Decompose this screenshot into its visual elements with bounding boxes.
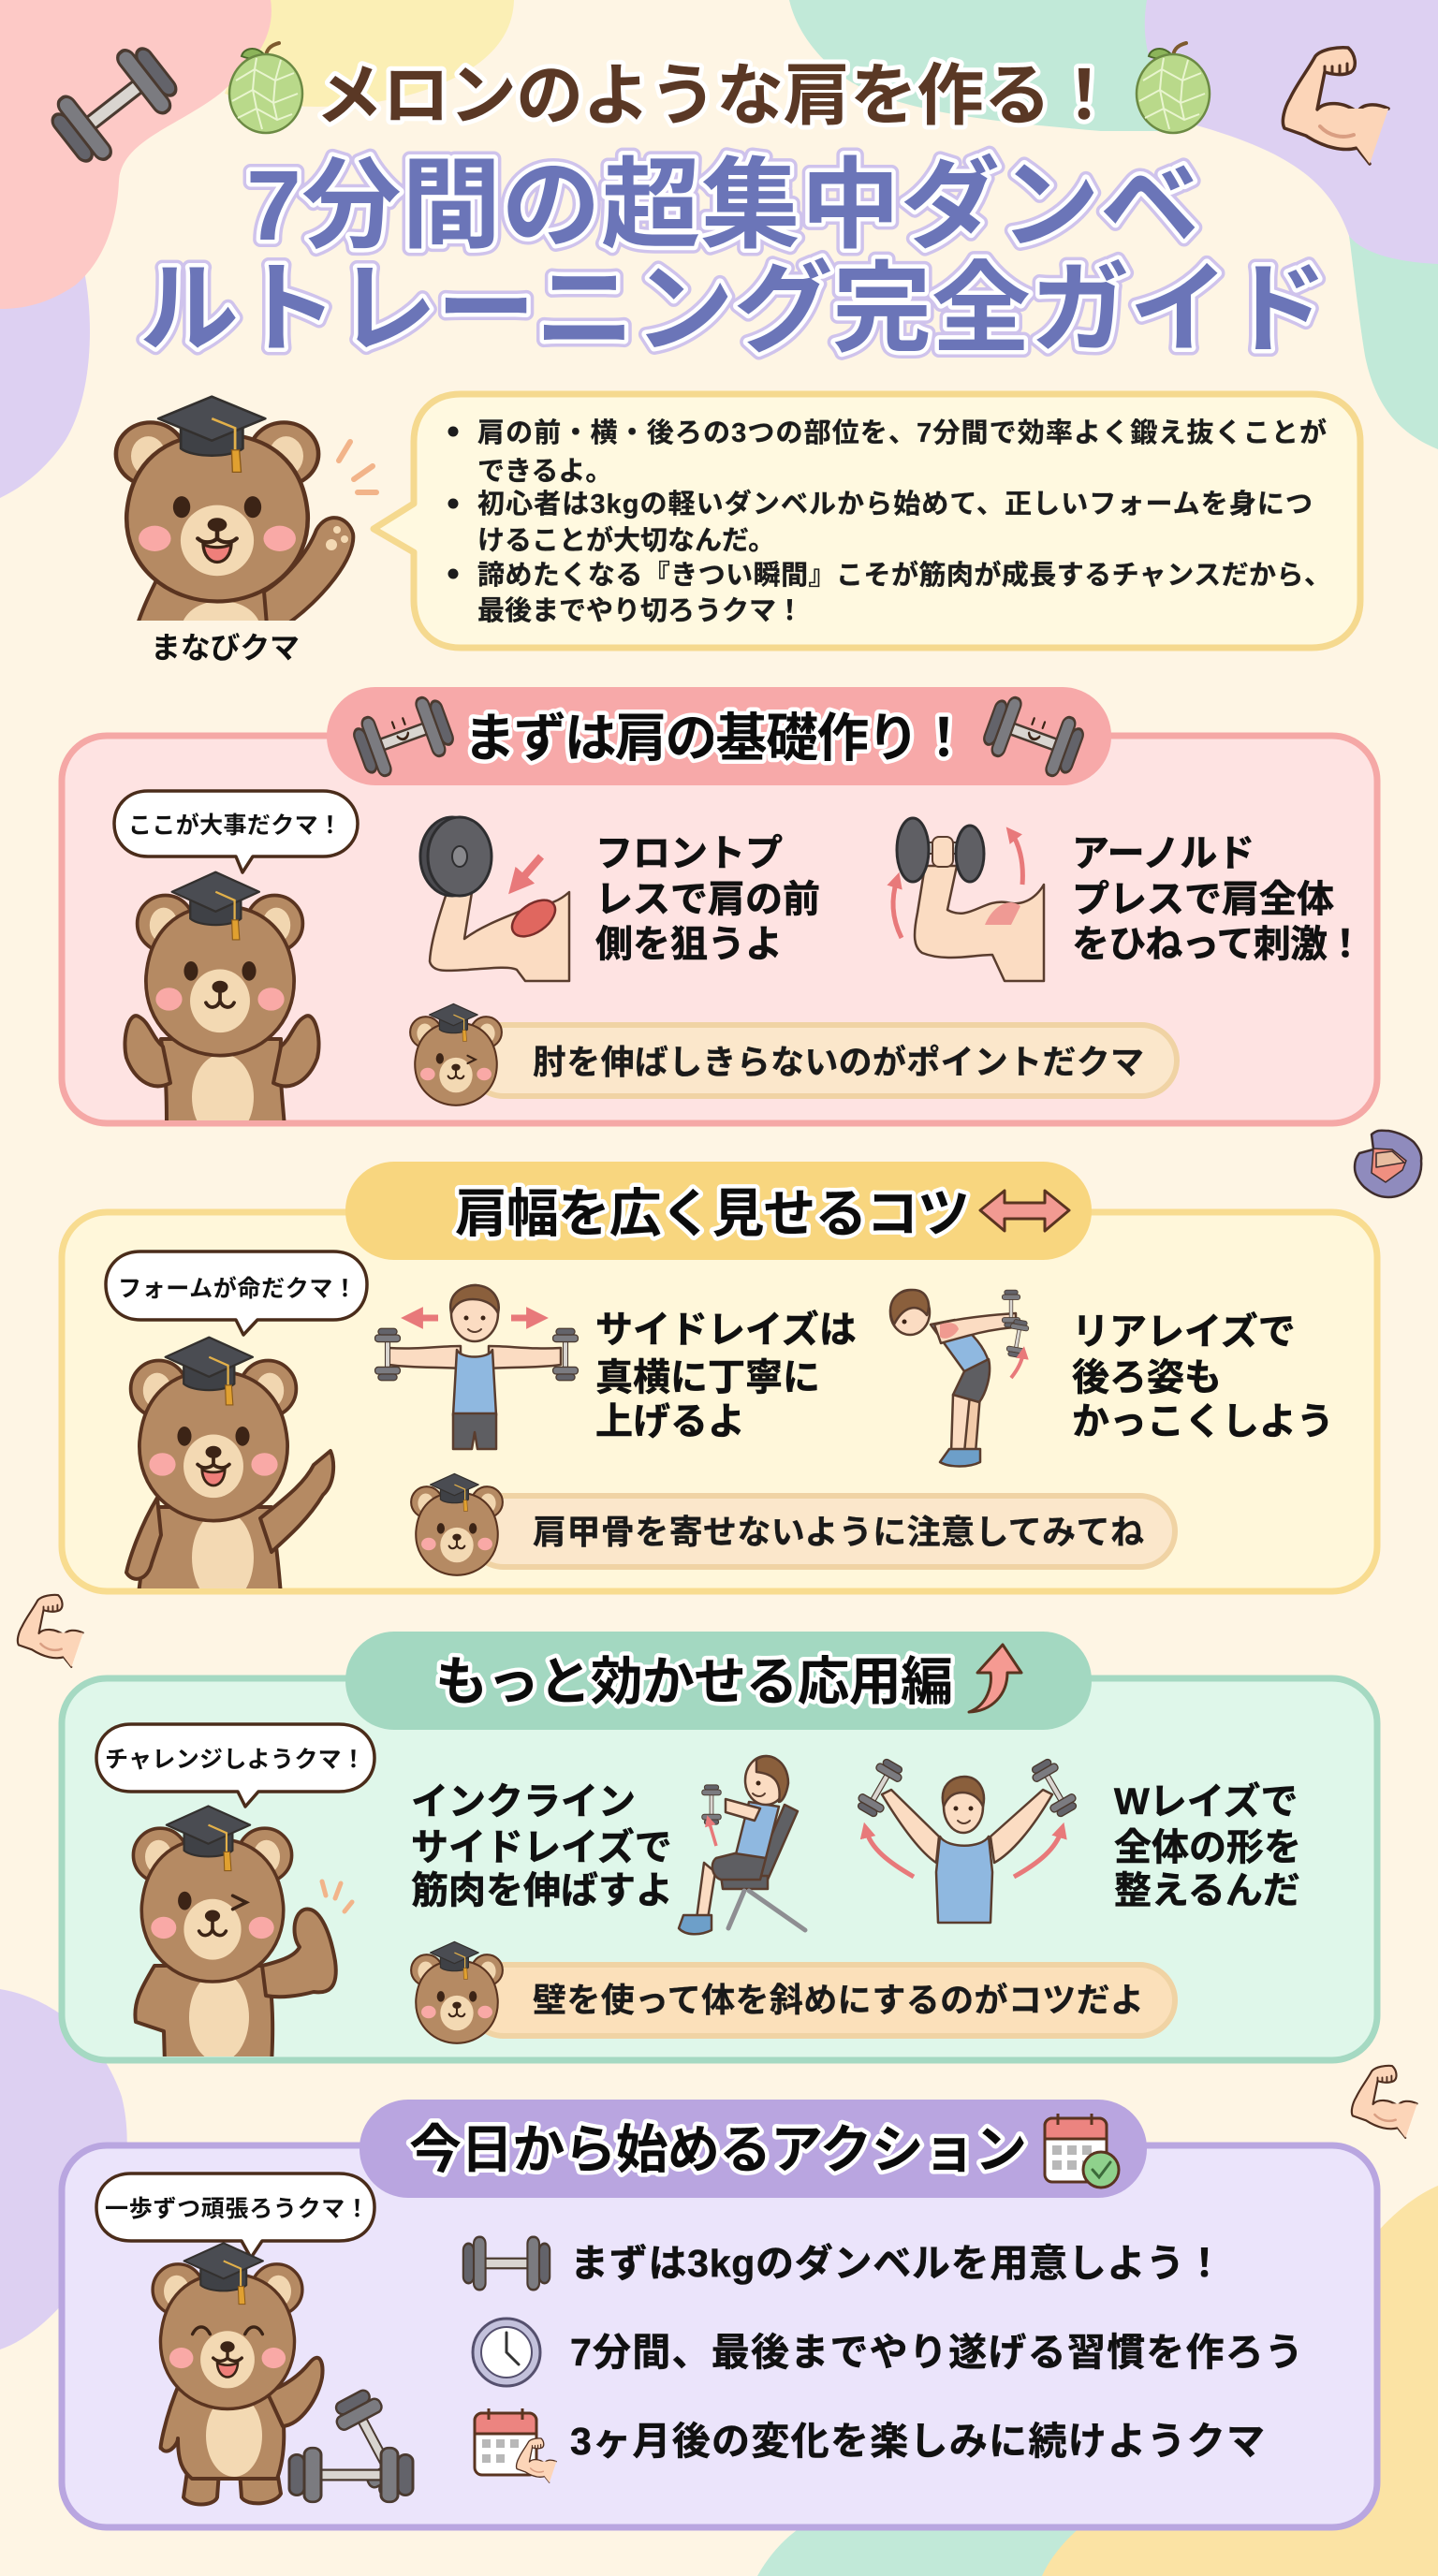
illustration: W raise bbox=[854, 1756, 1080, 1923]
panel 3: advanced bbox=[62, 1632, 1377, 2064]
text: side raise: 上げるよ bbox=[595, 1401, 745, 1442]
text: front press bbox=[595, 833, 820, 965]
icon: dumbbell with face right bbox=[979, 692, 1088, 782]
text: incline side raise: 筋肉を伸ばすよ bbox=[411, 1870, 673, 1911]
panel 4 heading: 今日から始めるアクション bbox=[409, 2120, 1027, 2179]
mini bear: panel 2 bbox=[411, 1473, 503, 1575]
action 1: dumbbell row: まずは3kgのダンベルを用意しよう！ bbox=[570, 2242, 1224, 2285]
text: rear raise: かっこくしよう bbox=[1072, 1401, 1334, 1442]
text: W raise: 整えるんだ bbox=[1114, 1870, 1300, 1911]
text: front press: 側を狙うよ bbox=[595, 924, 783, 965]
text: rear raise: リアレイズで bbox=[1072, 1311, 1296, 1353]
speech bubble: intro: できるよ。 bbox=[477, 457, 612, 487]
action 2: clock row bbox=[473, 2319, 1303, 2386]
illustration: incline raise bbox=[679, 1756, 805, 1934]
text: arnold press: をひねって刺激！ bbox=[1072, 924, 1364, 965]
panel 4 card bbox=[62, 2145, 1377, 2527]
panel 2 header pill bbox=[345, 1162, 1092, 1260]
mini bear: panel 1 bbox=[410, 1003, 502, 1105]
speech bubble: intro: 肩の前・横・後ろの3つの部位を、7分間で効率よく鍛え抜くことが bbox=[477, 417, 1327, 448]
text: side raise bbox=[595, 1310, 857, 1442]
bubble: panel 3 bbox=[96, 1724, 374, 1807]
decoration: dumbbell top left bbox=[43, 38, 185, 171]
text: incline side raise: サイドレイズで bbox=[411, 1827, 672, 1868]
speech bubble: intro: 最後までやり切ろうクマ！ bbox=[477, 595, 803, 626]
panel 3 heading: もっと効かせる応用編 bbox=[435, 1652, 953, 1711]
action 3: calendar row: 3ヶ月後の変化を楽しみに続けようクマ bbox=[570, 2420, 1265, 2463]
text: incline side raise: インクライン bbox=[411, 1781, 636, 1822]
speech bubble: intro: 諦めたくなる『きつい瞬間』こそが筋肉が成長するチャンスだから、 bbox=[477, 559, 1331, 591]
tip pill: panel 1: 肘を伸ばしきらないのがポイントだクマ bbox=[533, 1043, 1144, 1081]
speech bubble: intro: 初心者は3kgの軽いダンベルから始めて、正しいフォームを身につ bbox=[477, 488, 1313, 520]
action 3: calendar row bbox=[475, 2408, 1265, 2482]
tip pill: panel 3: 壁を使って体を斜めにするのがコツだよ bbox=[533, 1981, 1144, 2019]
title line 2 outline: 7分間の超集中ダンベ bbox=[246, 151, 1199, 261]
tip pill: panel 2: 肩甲骨を寄せないように注意してみてね bbox=[533, 1513, 1144, 1551]
title line 1: メロンのような肩を作る！ bbox=[315, 59, 1118, 134]
text: side raise: サイドレイズは bbox=[595, 1310, 857, 1351]
mascot: bear pointing bbox=[126, 1338, 333, 1604]
bubble: panel 3: チャレンジしようクマ！ bbox=[105, 1747, 365, 1773]
text: rear raise bbox=[1072, 1311, 1334, 1442]
panel 4 header pill bbox=[360, 2100, 1147, 2198]
illustration: rear raise bbox=[890, 1290, 1030, 1466]
panel 1 card bbox=[62, 736, 1377, 1123]
panel 2 card bbox=[62, 1212, 1377, 1591]
panel 2: wide shoulders bbox=[62, 1162, 1377, 1604]
panel 4: actions bbox=[62, 2100, 1377, 2527]
panel 2 heading: 肩幅を広く見せるコツ bbox=[455, 1184, 970, 1243]
panel 1: shoulder basics bbox=[62, 687, 1377, 1140]
text: arnold press: アーノルド bbox=[1072, 833, 1255, 874]
title line 2 outline: 7分間の超集中ダンベ bbox=[246, 151, 1199, 261]
bubble: panel 1: ここが大事だクマ！ bbox=[128, 812, 342, 839]
bubble: panel 2: フォームが命だクマ！ bbox=[118, 1275, 357, 1302]
illustration: side raise bbox=[375, 1285, 578, 1449]
title line 3 outline: ルトレーニング完全ガイド bbox=[139, 255, 1328, 365]
action 2: clock row: 7分間、最後までやり遂げる習慣を作ろう bbox=[570, 2331, 1303, 2374]
panel 1 header pill bbox=[327, 687, 1111, 785]
bubble: panel 1 bbox=[114, 791, 358, 872]
text: W raise bbox=[1114, 1781, 1301, 1911]
text: incline side raise bbox=[411, 1781, 673, 1911]
mascot: bear winking flex bbox=[133, 1806, 352, 2064]
icon: curved up arrow bbox=[969, 1645, 1021, 1712]
icon: melon right bbox=[1137, 43, 1210, 133]
icon: melon left bbox=[229, 43, 302, 133]
illustration: front press bbox=[420, 817, 569, 981]
icon: double arrow bbox=[980, 1191, 1069, 1231]
decoration: small arm right bbox=[1352, 2066, 1417, 2138]
text: front press: レスで肩の前 bbox=[595, 879, 820, 920]
text: W raise: 全体の形を bbox=[1114, 1827, 1301, 1868]
mascot: manabi bear intro bbox=[114, 395, 379, 621]
panel 3 card bbox=[62, 1678, 1377, 2060]
mascot name: まなびクマ bbox=[151, 631, 300, 665]
tip pill: panel 3 bbox=[468, 1965, 1175, 2036]
mascot: bear with dumbbells bbox=[153, 2243, 420, 2505]
speech bubble: intro: けることが大切なんだ。 bbox=[477, 524, 775, 556]
text: front press: フロントプ bbox=[595, 833, 783, 874]
icon: dumbbell with face left bbox=[349, 692, 458, 782]
decoration: small shoulder badge bbox=[1355, 1131, 1421, 1197]
speech bubble: intro bbox=[374, 394, 1360, 648]
title line 3 outline: ルトレーニング完全ガイド bbox=[139, 255, 1328, 365]
bubble: panel 2 bbox=[106, 1251, 367, 1335]
text: arnold press bbox=[1072, 833, 1364, 965]
text: W raise: Wレイズで bbox=[1114, 1781, 1299, 1822]
text: side raise: 真横に丁寧に bbox=[595, 1357, 820, 1398]
decoration: small arm left bbox=[18, 1595, 83, 1667]
mascot: bear flexing both arms bbox=[125, 872, 319, 1140]
text: arnold press: プレスで肩全体 bbox=[1072, 879, 1334, 920]
panel 3 header pill bbox=[345, 1632, 1092, 1730]
tip pill: panel 2 bbox=[468, 1496, 1175, 1567]
text: rear raise: 後ろ姿も bbox=[1072, 1357, 1222, 1398]
icon: calendar check bbox=[1045, 2114, 1119, 2188]
bubble: panel 4 bbox=[96, 2174, 374, 2258]
decoration: flexed arm top right bbox=[1283, 48, 1388, 164]
bubble: panel 4: 一歩ずつ頑張ろうクマ！ bbox=[105, 2196, 369, 2222]
illustration: arnold press bbox=[893, 818, 1044, 981]
mini bear: panel 3 bbox=[411, 1941, 503, 2043]
panel 1 heading: まずは肩の基礎作り！ bbox=[463, 709, 970, 768]
tip pill: panel 1 bbox=[468, 1025, 1177, 1096]
